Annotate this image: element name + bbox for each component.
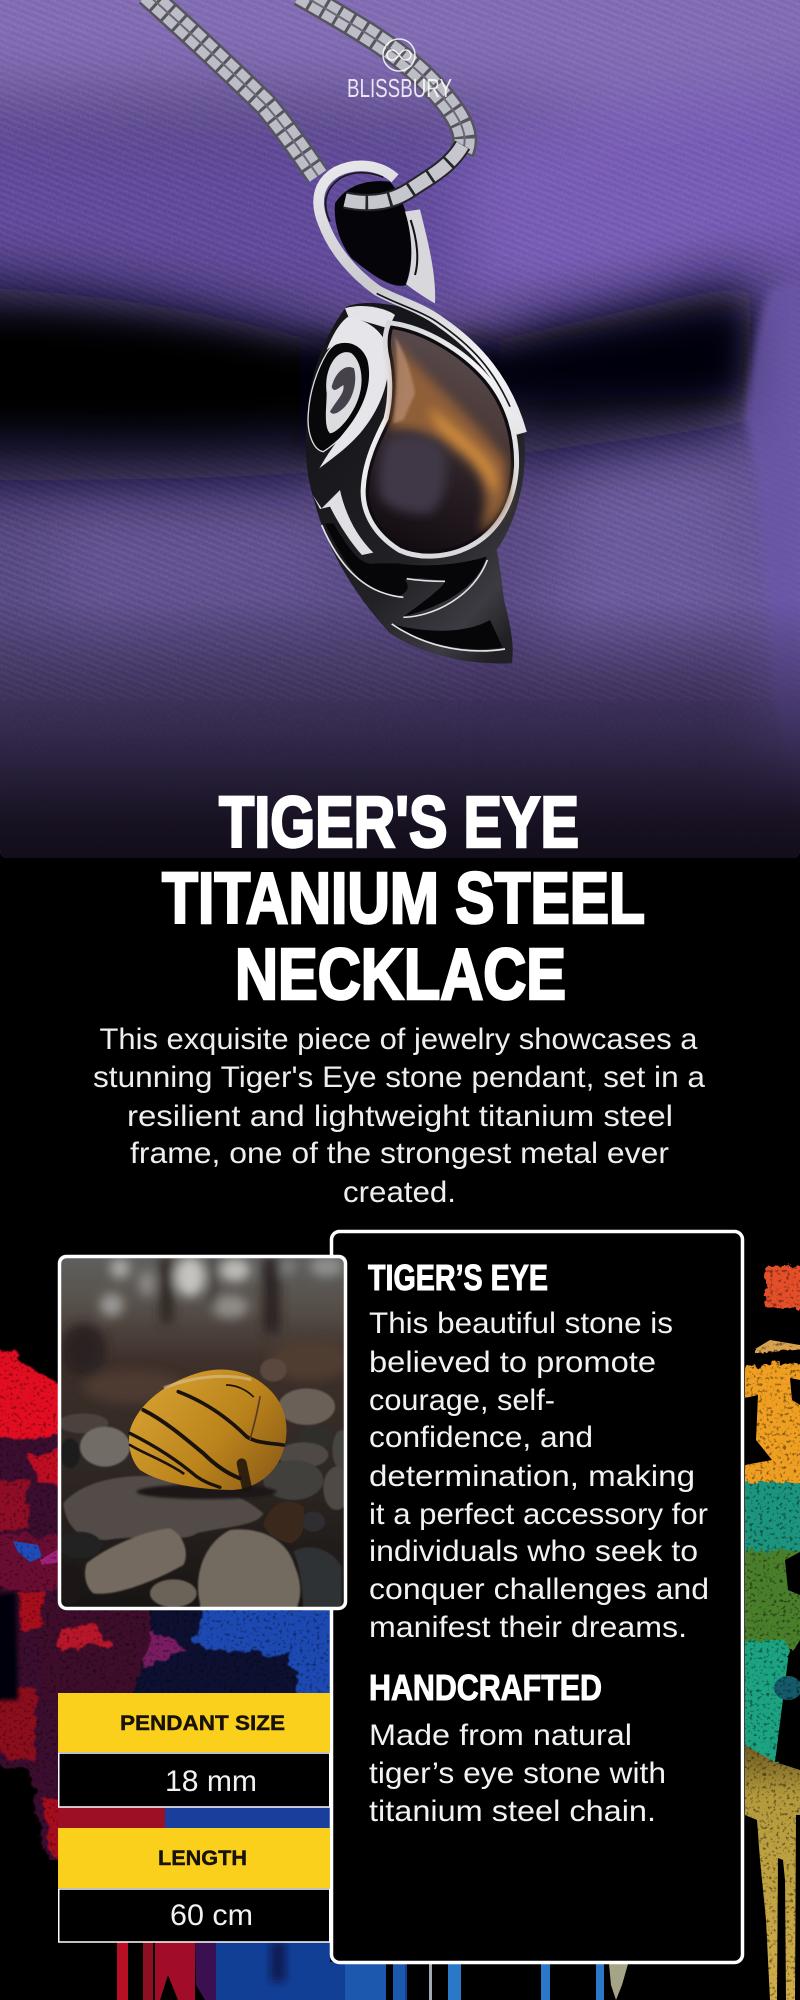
right paint splash bbox=[745, 1264, 800, 2000]
spec table: length: LENGTH bbox=[158, 1847, 247, 1870]
photo: tiger's eye stone on rocks bbox=[57, 1255, 351, 1610]
stone description: manifest their dreams. bbox=[369, 1611, 687, 1644]
silver engraved lines bbox=[322, 525, 505, 651]
handcrafted description: Made from natural bbox=[369, 1719, 632, 1752]
stone description: individuals who seek to bbox=[369, 1535, 698, 1568]
intro paragraph: created. bbox=[343, 1176, 456, 1209]
spec table: pendant size bbox=[58, 1693, 330, 1807]
shoulder bbox=[345, 306, 395, 328]
rocks bbox=[57, 1358, 351, 1608]
tiger's eye glow bbox=[390, 340, 508, 532]
stone description: This beautiful stone is bbox=[369, 1307, 673, 1340]
dark teal patch bbox=[774, 1676, 800, 1700]
bail hole bbox=[335, 181, 412, 286]
pendant body bbox=[306, 303, 525, 664]
spiral center bbox=[326, 352, 362, 433]
blue paint spot bbox=[13, 1541, 42, 1562]
spec table: length: 60 cm bbox=[170, 1899, 253, 1932]
stone description bbox=[369, 1307, 709, 1644]
pendant bbox=[306, 145, 525, 664]
tiger's eye stone bbox=[129, 1369, 287, 1490]
stone description: believed to promote bbox=[369, 1346, 656, 1379]
hero photo: purple fabric with necklace bbox=[0, 0, 800, 900]
title: NECKLACE bbox=[235, 935, 566, 1015]
heading: tiger's eye: TIGER’S EYE bbox=[368, 1257, 548, 1298]
stone tip highlight bbox=[393, 337, 415, 423]
logo emblem bbox=[383, 39, 415, 71]
brand name: BLISSBURY bbox=[347, 73, 452, 103]
intro paragraph: frame, one of the strongest metal ever bbox=[130, 1137, 669, 1170]
necklace chain bbox=[147, 0, 465, 176]
handcrafted description bbox=[369, 1719, 666, 1828]
title: TITANIUM STEEL bbox=[162, 859, 645, 939]
silver S band bbox=[319, 166, 522, 433]
speckle overlay bbox=[745, 1265, 800, 1755]
right fold bbox=[742, 286, 798, 664]
fabric twill texture bbox=[0, 92, 800, 629]
speckle overlay bbox=[58, 1610, 330, 1694]
dried leaves bbox=[263, 1501, 305, 1543]
stone stripes bbox=[130, 1376, 283, 1487]
swirl panel bbox=[307, 343, 369, 452]
handcrafted description: titanium steel chain. bbox=[369, 1795, 656, 1828]
bail right arm bbox=[405, 209, 435, 303]
paint behind the tables bbox=[40, 1605, 345, 1830]
stone description: conquer challenges and bbox=[369, 1573, 709, 1606]
panel: description bbox=[332, 1232, 742, 1962]
fabric background bbox=[0, 0, 800, 900]
gold drips bbox=[745, 1745, 800, 2000]
bottom fade bbox=[0, 600, 800, 860]
spec table: length bbox=[58, 1828, 330, 1942]
brand logo bbox=[347, 39, 452, 103]
black enamel tip bbox=[395, 620, 503, 649]
blurred forest background bbox=[60, 1257, 350, 1403]
intro paragraph: resilient and lightweight titanium steel bbox=[127, 1100, 673, 1133]
bottom paint drips bbox=[117, 1942, 628, 2000]
tribal engraving: hook bbox=[313, 490, 373, 555]
spec table: pendant size: 18 mm bbox=[165, 1765, 257, 1798]
label cell bbox=[58, 1693, 330, 1752]
black gaps in the orange bbox=[745, 1312, 800, 1762]
label cell bbox=[58, 1828, 330, 1888]
handcrafted description: tiger’s eye stone with bbox=[369, 1757, 666, 1790]
silver swirl arm bbox=[319, 317, 389, 468]
bail arm slit bbox=[411, 220, 417, 275]
stone mauve highlight bbox=[379, 434, 447, 514]
black enamel tribal bbox=[325, 523, 487, 617]
intro paragraph: stunning Tiger's Eye stone pendant, set in a bbox=[93, 1061, 705, 1094]
value cell bbox=[59, 1753, 330, 1807]
stone description: it a perfect accessory for bbox=[369, 1498, 708, 1531]
heading: handcrafted: HANDCRAFTED bbox=[369, 1667, 602, 1708]
stone description: courage, self- bbox=[369, 1384, 555, 1417]
intro paragraph: This exquisite piece of jewelry showcases a bbox=[100, 1023, 698, 1056]
stone shadow bbox=[137, 1484, 277, 1499]
intro paragraph bbox=[93, 1023, 705, 1209]
left paint splash bbox=[0, 1348, 60, 1860]
stone description: determination, making bbox=[369, 1460, 695, 1493]
value cell bbox=[59, 1889, 330, 1942]
silver frame bbox=[367, 327, 512, 552]
near-black void in the splash bbox=[0, 1592, 18, 1700]
stone description: confidence, and bbox=[369, 1421, 593, 1454]
title bbox=[162, 783, 645, 1015]
chain link through bail bbox=[345, 145, 463, 203]
title: TIGER'S EYE bbox=[219, 783, 579, 863]
spec table: pendant size: PENDANT SIZE bbox=[120, 1712, 285, 1735]
frame gap line bbox=[367, 327, 512, 552]
